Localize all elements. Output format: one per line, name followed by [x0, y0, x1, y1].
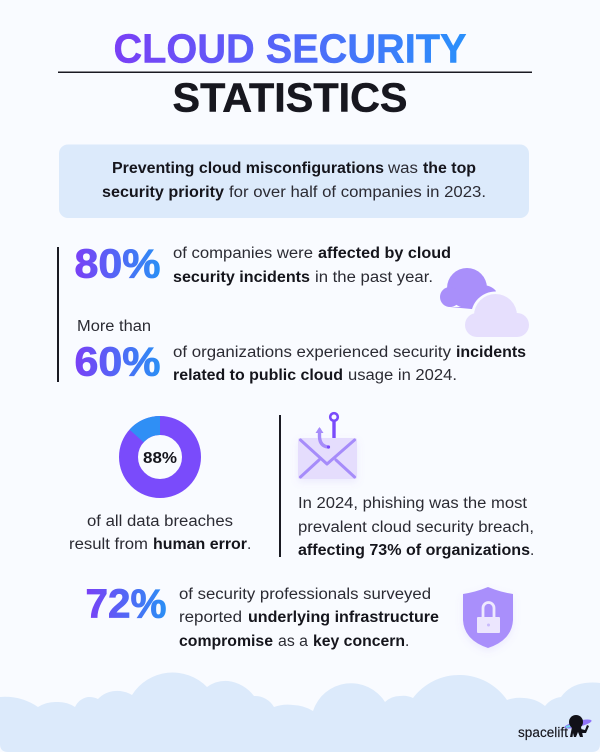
text: 60% description: of organizations experienced security	[173, 344, 451, 361]
panel: top priority callout: security priority	[102, 184, 224, 201]
text: 72% description: key concern	[313, 633, 405, 650]
text: 80% description	[173, 245, 451, 286]
icon: clouds	[440, 268, 529, 340]
text: 72% description: as a	[278, 633, 308, 650]
panel: incident statistics	[57, 241, 526, 385]
text: 72% description: reported	[179, 609, 242, 626]
text: phishing description: affecting 73% of organizations	[298, 542, 530, 559]
text: 80% description: security incidents	[173, 269, 310, 286]
text: human error description	[69, 513, 251, 553]
panel: top priority callout: Preventing cloud misconfigurations	[112, 160, 384, 177]
panel: phishing	[298, 413, 534, 559]
stat: 80%: 80%	[74, 241, 160, 287]
text: 60% description: incidents	[456, 344, 526, 361]
stat: 60%: 60%	[74, 339, 160, 385]
title line 2: STATISTICS	[172, 75, 408, 121]
text: 80% description: of companies were	[173, 245, 313, 262]
text: 80% description: affected by cloud	[318, 245, 451, 262]
donut chart: 88%	[128, 416, 192, 488]
text: 60% description	[173, 344, 526, 384]
decorative cloud footer	[0, 673, 600, 752]
title	[58, 26, 532, 121]
text: 72% description	[179, 586, 439, 650]
text: human error description: result from	[69, 536, 148, 553]
logo: spacelift: spacelift	[518, 725, 568, 740]
icon: shield with padlock	[463, 587, 513, 648]
text: 72% description: compromise	[179, 633, 273, 650]
text: more than: More than	[77, 318, 151, 335]
panel: top priority callout	[59, 144, 529, 218]
panel: infrastructure compromise	[86, 581, 513, 650]
text: phishing description	[298, 495, 534, 559]
text: 72% description: .	[405, 633, 409, 650]
title line 1: CLOUD SECURITY	[114, 26, 466, 72]
text: phishing description: .	[530, 542, 534, 559]
panel: human error	[69, 416, 251, 553]
icon: phishing envelope	[298, 413, 357, 479]
logo: spacelift	[518, 715, 592, 740]
donut chart: 88%: 88%	[143, 450, 177, 467]
text: 72% description: of security professionals surveyed	[179, 586, 431, 603]
panel: top priority callout: was	[387, 160, 418, 177]
stat: 72%: 72%	[86, 581, 166, 627]
text: 80% description: in the past year.	[315, 269, 433, 286]
text: human error description: human error	[153, 536, 247, 553]
panel: top priority callout: the top	[423, 160, 476, 177]
text: phishing description: prevalent cloud security breach,	[298, 519, 534, 536]
panel: top priority callout: for over half of companies in 2023.	[229, 184, 486, 201]
text: human error description: .	[247, 536, 251, 553]
text: human error description: of all data breaches	[87, 513, 233, 530]
text: 72% description: underlying infrastructure	[248, 609, 439, 626]
text: phishing description: In 2024, phishing was the most	[298, 495, 528, 512]
text: 60% description: usage in 2024.	[348, 367, 457, 384]
text: 60% description: related to public cloud	[173, 367, 343, 384]
